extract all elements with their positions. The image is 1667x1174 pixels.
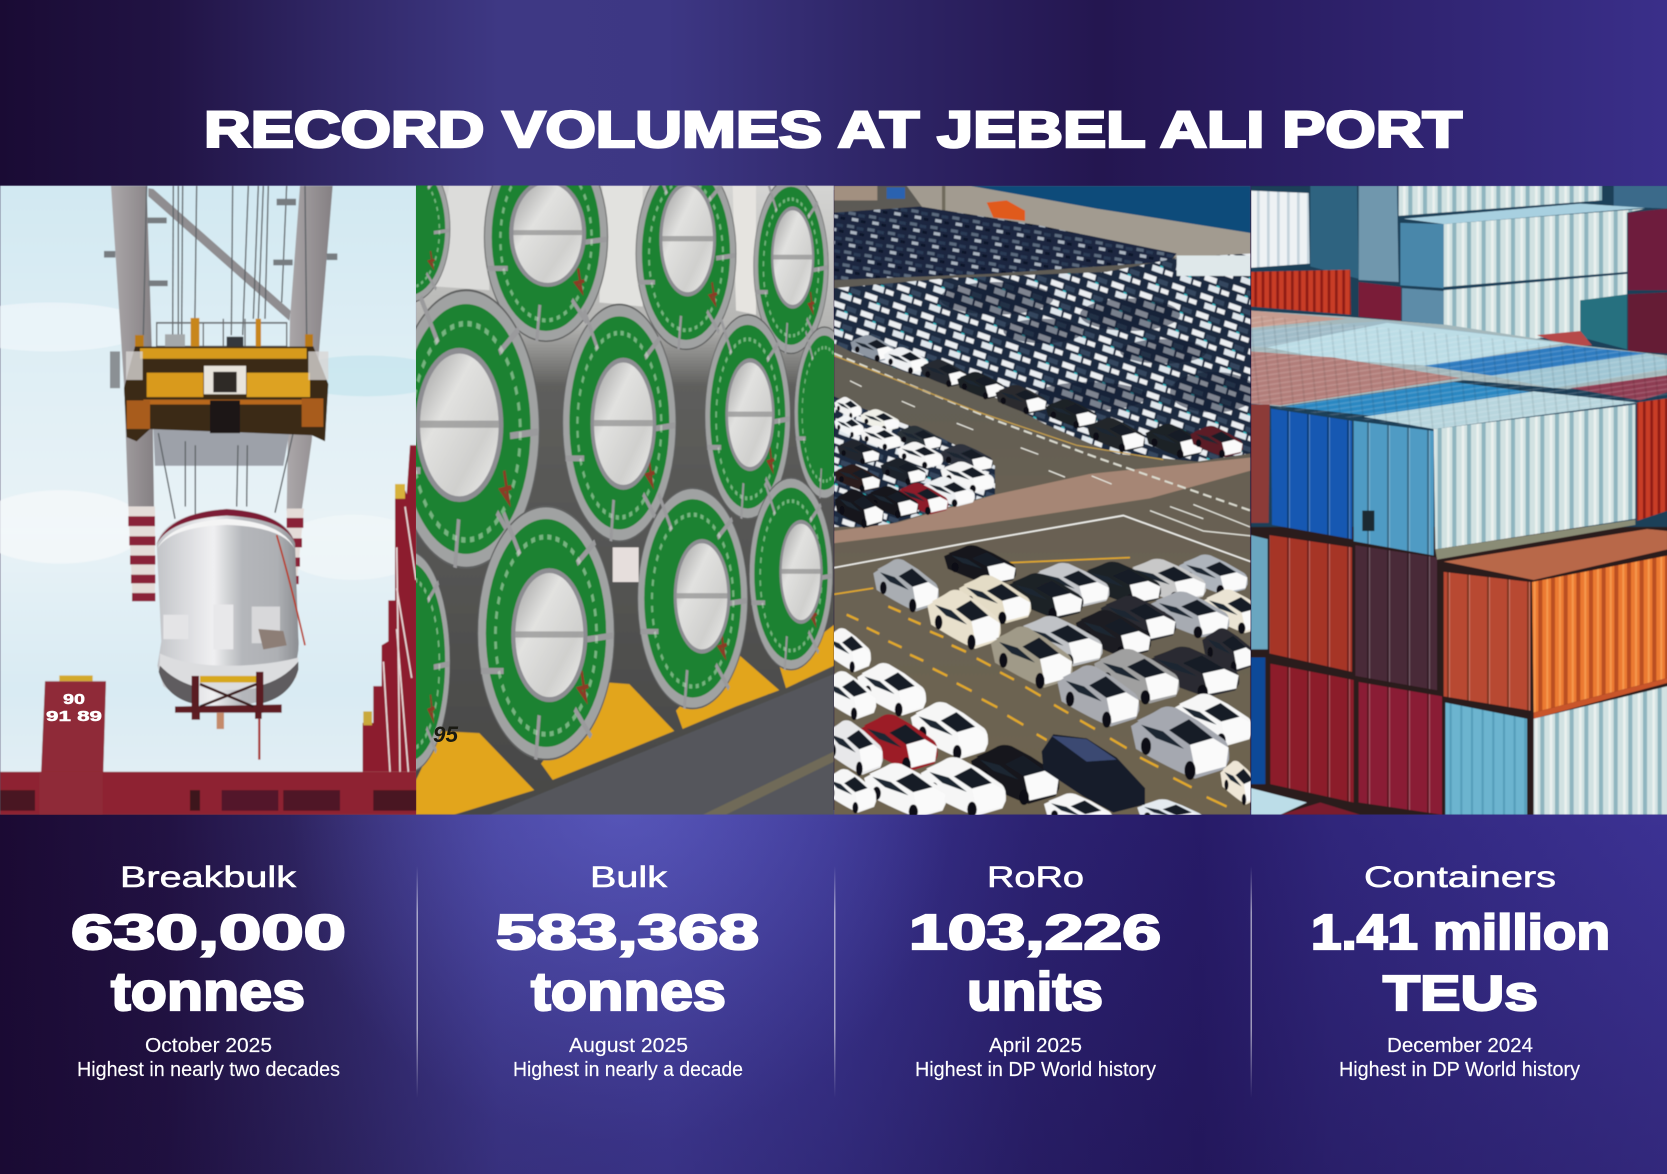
coils upper row (369, 133, 828, 353)
crane legs (111, 186, 333, 601)
panel: bulk photo of steel coils (416, 186, 834, 815)
stat: roro: Highest in DP World history (915, 1059, 1156, 1081)
red ship deck (0, 772, 417, 815)
left lot base (834, 396, 995, 527)
panel: breakbulk photo of crane lifting drum (0, 186, 447, 815)
yellow spreader (110, 318, 328, 441)
navy van (1042, 734, 1145, 813)
stat: breakbulk: Highest in nearly two decades (77, 1059, 340, 1081)
left edge containers (1251, 398, 1667, 784)
stat: roro: 103,226 (909, 905, 1161, 960)
stat: breakbulk: 630,000 (71, 905, 346, 960)
main pale container (1434, 404, 1635, 549)
divider 1 (416, 866, 418, 1098)
stat: bulk (496, 861, 759, 1081)
coils lower row (369, 478, 833, 772)
orange container (1444, 529, 1667, 719)
stat: containers: 1.41 million (1311, 905, 1610, 960)
road (489, 674, 834, 815)
silver drum (157, 509, 305, 760)
stat: containers (1311, 861, 1610, 1081)
dark clusters in lot (940, 282, 1257, 413)
stat: bulk: Bulk (590, 861, 668, 894)
stat: roro: April 2025 (989, 1035, 1082, 1057)
stat: containers: Highest in DP World history (1339, 1059, 1580, 1081)
stat: roro (909, 861, 1161, 1081)
far car lot (834, 207, 1177, 280)
divider 3 (1250, 866, 1252, 1098)
red ship structure right (363, 445, 417, 772)
stat: breakbulk: tonnes (111, 962, 305, 1022)
middle car lot (834, 253, 1251, 462)
stat: bulk: 583,368 (496, 905, 759, 960)
road markings (834, 353, 1251, 807)
stat: breakbulk: October 2025 (145, 1035, 272, 1057)
left car lot (834, 397, 994, 528)
stat: roro: units (967, 962, 1103, 1022)
stat: containers: December 2024 (1387, 1035, 1533, 1057)
panel: containers photo (1251, 186, 1667, 815)
stat: breakbulk: Breakbulk (120, 861, 297, 894)
yellow wheel chocks (416, 625, 834, 815)
stat: roro: RoRo (987, 861, 1084, 894)
text on tower: 90: 90 (63, 691, 85, 708)
stat: bulk: Highest in nearly a decade (513, 1059, 743, 1081)
front row of middle lot (850, 335, 1243, 459)
stat: containers: TEUs (1383, 966, 1538, 1021)
container roofs (1251, 311, 1667, 429)
coils middle row (393, 290, 854, 568)
crane cables (143, 186, 307, 519)
crane lamps (104, 199, 337, 286)
text on tower: 91 89: 91 89 (46, 708, 102, 725)
sea and quay (834, 186, 1251, 258)
foreground cars (873, 545, 1268, 805)
blue container doors (1271, 409, 1434, 556)
upper container stacks (1251, 186, 1667, 353)
title: RECORD VOLUMES AT JEBEL ALI PORT (204, 101, 1462, 158)
stat: bulk: August 2025 (569, 1035, 688, 1057)
stat: bulk: tonnes (531, 962, 726, 1022)
light blue lower container (1251, 686, 1667, 815)
red and dark container doors (1270, 535, 1442, 815)
stat: breakbulk (71, 861, 346, 1081)
divider 2 (834, 866, 836, 1098)
chock numbers: 95 (433, 722, 459, 747)
panel: roro photo of parked cars (821, 186, 1268, 833)
stat: containers: Containers (1364, 861, 1556, 894)
foreground left white cars (821, 628, 1203, 833)
red tower (39, 676, 106, 815)
